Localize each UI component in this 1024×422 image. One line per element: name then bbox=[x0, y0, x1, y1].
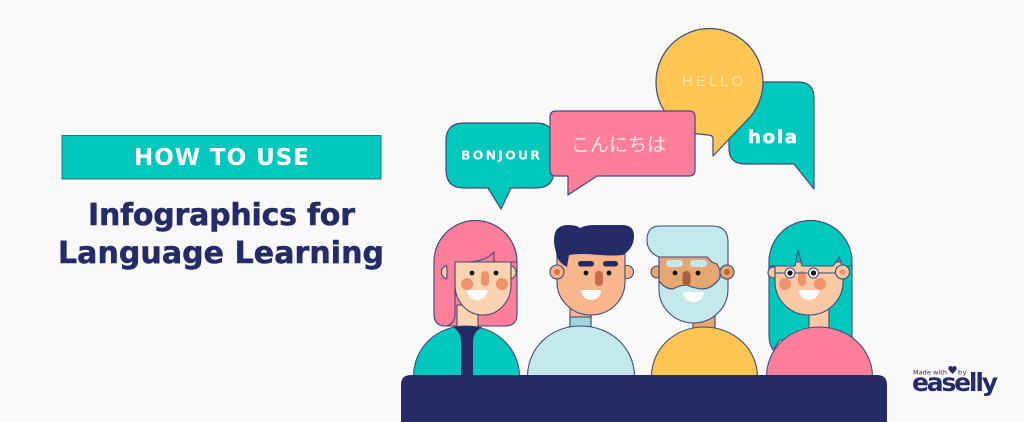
ear bbox=[550, 265, 564, 279]
heading: Language Learning bbox=[58, 236, 384, 271]
face bbox=[775, 262, 843, 315]
left ear bbox=[441, 266, 447, 279]
right ear bbox=[511, 266, 516, 279]
bubble: hola bbox=[729, 82, 814, 189]
face bbox=[557, 240, 625, 315]
banner: how to use: HOW TO USE bbox=[134, 145, 309, 171]
person: woman with pink hair bbox=[414, 221, 520, 376]
right ear bbox=[836, 265, 850, 279]
hair back bbox=[769, 220, 852, 350]
heading: Infographics for bbox=[88, 198, 355, 233]
face and moustache bbox=[659, 257, 720, 289]
facial features bbox=[779, 271, 826, 300]
bangs bbox=[769, 220, 852, 266]
bubble: bonjour: BONJOUR bbox=[461, 148, 540, 162]
neck bbox=[457, 305, 478, 329]
hair back bbox=[434, 221, 517, 326]
bubble: konnichiwa bbox=[550, 111, 695, 195]
hair and beard bbox=[647, 226, 728, 323]
facial features bbox=[666, 260, 707, 302]
person: man with navy hair bbox=[528, 225, 634, 376]
title block bbox=[58, 136, 384, 271]
ear bbox=[720, 265, 734, 279]
hair bbox=[554, 225, 634, 267]
body bbox=[652, 327, 758, 376]
left ear bbox=[768, 267, 779, 278]
bubble: hello bbox=[656, 28, 763, 156]
icon: heart bbox=[948, 366, 957, 374]
body bbox=[414, 326, 520, 376]
neck bbox=[570, 305, 591, 327]
face bbox=[455, 262, 511, 315]
bangs bbox=[434, 221, 517, 326]
table bbox=[401, 375, 887, 422]
glasses bbox=[775, 268, 838, 278]
logo: made with love by easelly: easelly bbox=[912, 368, 998, 397]
bubble: konnichiwa: こんにちは bbox=[571, 135, 666, 156]
bubble: hola: hola bbox=[748, 127, 797, 148]
heading bbox=[58, 198, 384, 271]
logo: made with love by easelly: Made with bbox=[913, 368, 947, 376]
facial features bbox=[578, 261, 618, 300]
body bbox=[528, 326, 634, 376]
body bbox=[766, 327, 872, 376]
banner: how to use bbox=[62, 136, 381, 179]
logo: made with love by easelly: by bbox=[958, 368, 967, 376]
neck bbox=[693, 314, 715, 329]
characters bbox=[414, 220, 872, 376]
person: old man with beard bbox=[647, 226, 758, 376]
speech bubbles bbox=[446, 28, 814, 209]
facial features bbox=[461, 271, 508, 300]
collar bbox=[453, 326, 482, 376]
neck bbox=[809, 305, 829, 329]
bubble: bonjour bbox=[446, 123, 554, 209]
bubble: hello: HELLO bbox=[682, 73, 743, 90]
person: woman with teal hair and glasses bbox=[766, 220, 872, 376]
collar bbox=[570, 317, 591, 328]
